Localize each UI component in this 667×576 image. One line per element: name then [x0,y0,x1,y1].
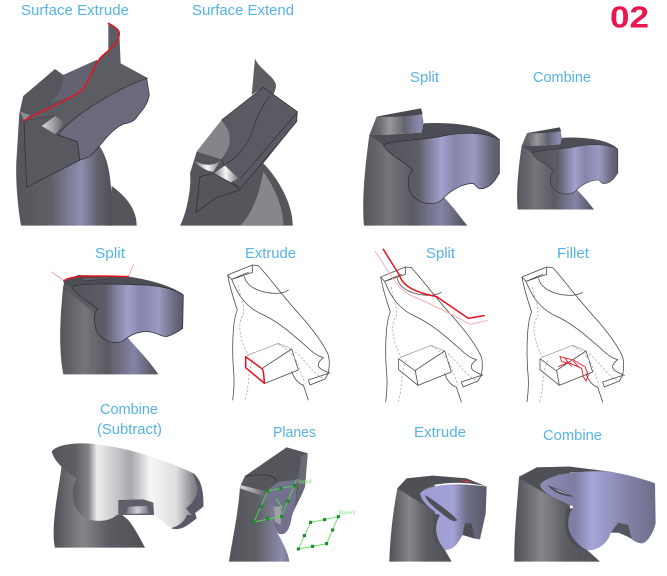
panel: extrude bottom [389,425,487,562]
heading: extrude: Extrude [414,425,466,441]
wireframe: extrude [228,265,330,400]
model: split with red curve [51,264,183,374]
model: combine [514,467,656,562]
panel: combine top [517,70,618,209]
heading: second line: (Subtract) [97,422,162,438]
model: subtracted body [52,443,203,548]
panel: combine bottom [514,428,656,562]
page number: 02 [610,0,649,34]
heading: split: Split [426,246,455,262]
model: extrude [389,476,487,562]
heading: surface extrude: Surface Extrude [21,3,129,19]
plane 9: Plane9 [339,511,355,517]
heading: surface extend: Surface Extend [192,3,294,19]
panel: surface extrude [16,3,149,226]
panel: split top [363,70,499,226]
model: planes [229,447,355,562]
wireframe: fillet [522,267,624,402]
model: surface extrude [16,23,149,226]
panel: surface extend [180,3,297,226]
heading: extrude: Extrude [245,246,296,262]
heading: split: Split [410,70,439,86]
heading: combine: Combine [533,70,591,86]
panel: extrude wireframe [228,246,330,400]
panel: planes [229,425,355,562]
model: combine [517,127,618,209]
heading: combine (subtract): Combine [100,402,158,418]
panel: split row two [51,246,183,374]
plane 8: Plane8 [295,480,312,486]
wireframe: split [375,249,488,402]
heading: split: Split [95,246,125,262]
model: split [363,108,499,226]
panel: fillet wireframe [522,246,624,402]
heading: planes: Planes [273,425,316,441]
heading: fillet: Fillet [557,246,589,262]
panel: combine subtract [52,402,203,548]
model: surface extend [180,58,297,226]
heading: combine: Combine [543,428,602,444]
panel: split wireframe [375,246,488,402]
